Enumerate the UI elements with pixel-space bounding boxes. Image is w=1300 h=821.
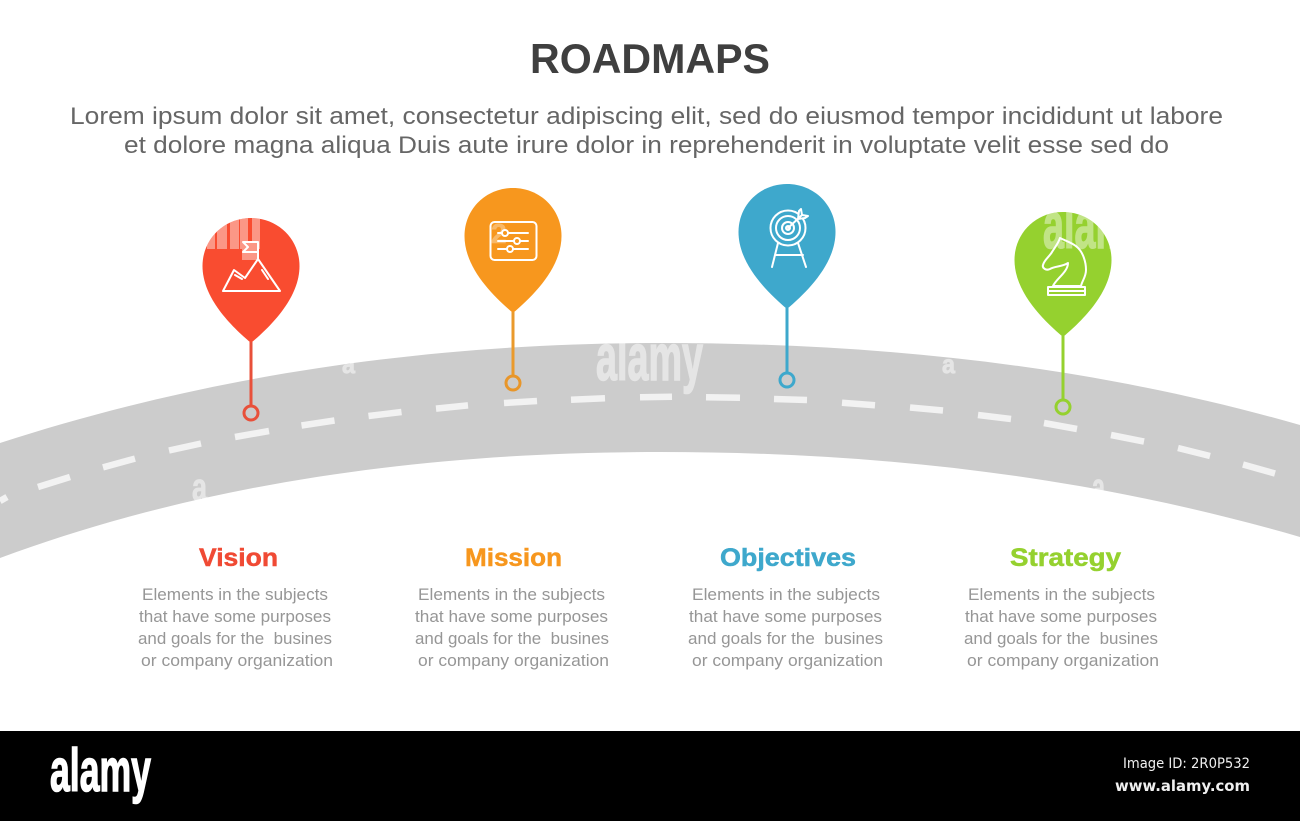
pin 3: objectives [738,184,836,387]
column: strategy [964,544,1159,670]
description: objectives: Elements in the subjects [692,585,880,604]
description: vision: and goals for the busines [138,629,332,648]
description: strategy: or company organization [967,651,1159,670]
description: vision: or company organization [141,651,333,670]
description: mission: or company organization [418,651,609,670]
description: mission: that have some purposes [415,607,608,626]
pin 1 watermark [207,218,260,260]
pin 1 stem [250,342,252,406]
watermark on road: a [192,467,208,509]
heading: mission: Mission [465,544,562,572]
pin 3 stem [786,308,788,373]
website: www.alamy.com [1115,777,1250,795]
icon: mountain with flag [223,242,280,291]
description: strategy: Elements in the subjects [968,585,1155,604]
watermark on road: a [942,349,955,379]
subtitle text: Lorem ipsum dolor sit amet, consectetur adipiscing elit, sed do eiusmod tempor incididunt ut labore [70,103,1223,130]
heading: objectives: Objectives [720,544,856,572]
icon: target with arrow [770,209,808,267]
icon: chess knight [1043,238,1086,295]
pin 4: strategy [1014,212,1112,416]
watermark on road: a [342,349,355,379]
pin 2: mission [464,188,562,390]
description: objectives: that have some purposes [689,607,882,626]
watermark on road [192,320,1106,509]
footer bar [0,731,1300,821]
pin 1: vision [202,218,300,420]
description: mission: Elements in the subjects [418,585,605,604]
watermark on road: alamy [596,320,703,394]
pin 4 marker [1056,400,1070,414]
description: objectives [688,585,883,670]
description: objectives: and goals for the busines [688,629,883,648]
description: strategy [964,585,1159,670]
pin 4 watermark: alamy [1043,188,1150,262]
pin 1 marker [244,406,258,420]
description: mission: and goals for the busines [415,629,609,648]
description: mission [415,585,609,670]
column: mission [415,544,609,670]
subtitle text: et dolore magna aliqua Duis aute irure dolor in reprehenderit in voluptate velit esse sed do [124,132,1169,159]
image id: Image ID: 2R0P532 [1123,756,1250,772]
description: objectives: or company organization [692,651,883,670]
pin 2 watermark: 2 [491,218,507,249]
pin 2 marker [506,376,520,390]
pin 2 stem [512,312,514,376]
curved road [0,343,1300,558]
title: ROADMAPS [530,35,770,82]
icon: sliders panel [490,222,536,260]
description: vision: Elements in the subjects [142,585,328,604]
heading: strategy: Strategy [1010,544,1121,572]
heading: vision: Vision [199,544,278,572]
subtitle text [70,103,1223,159]
watermark on road: a [1092,467,1106,509]
footer logo: alamy [50,737,151,804]
description: vision: that have some purposes [139,607,331,626]
description: strategy: that have some purposes [965,607,1157,626]
description: vision [138,585,333,670]
description: strategy: and goals for the busines [964,629,1158,648]
pin 4 stem [1062,336,1064,400]
column: objectives [688,544,883,670]
column: vision [138,544,333,670]
pin 3 marker [780,373,794,387]
